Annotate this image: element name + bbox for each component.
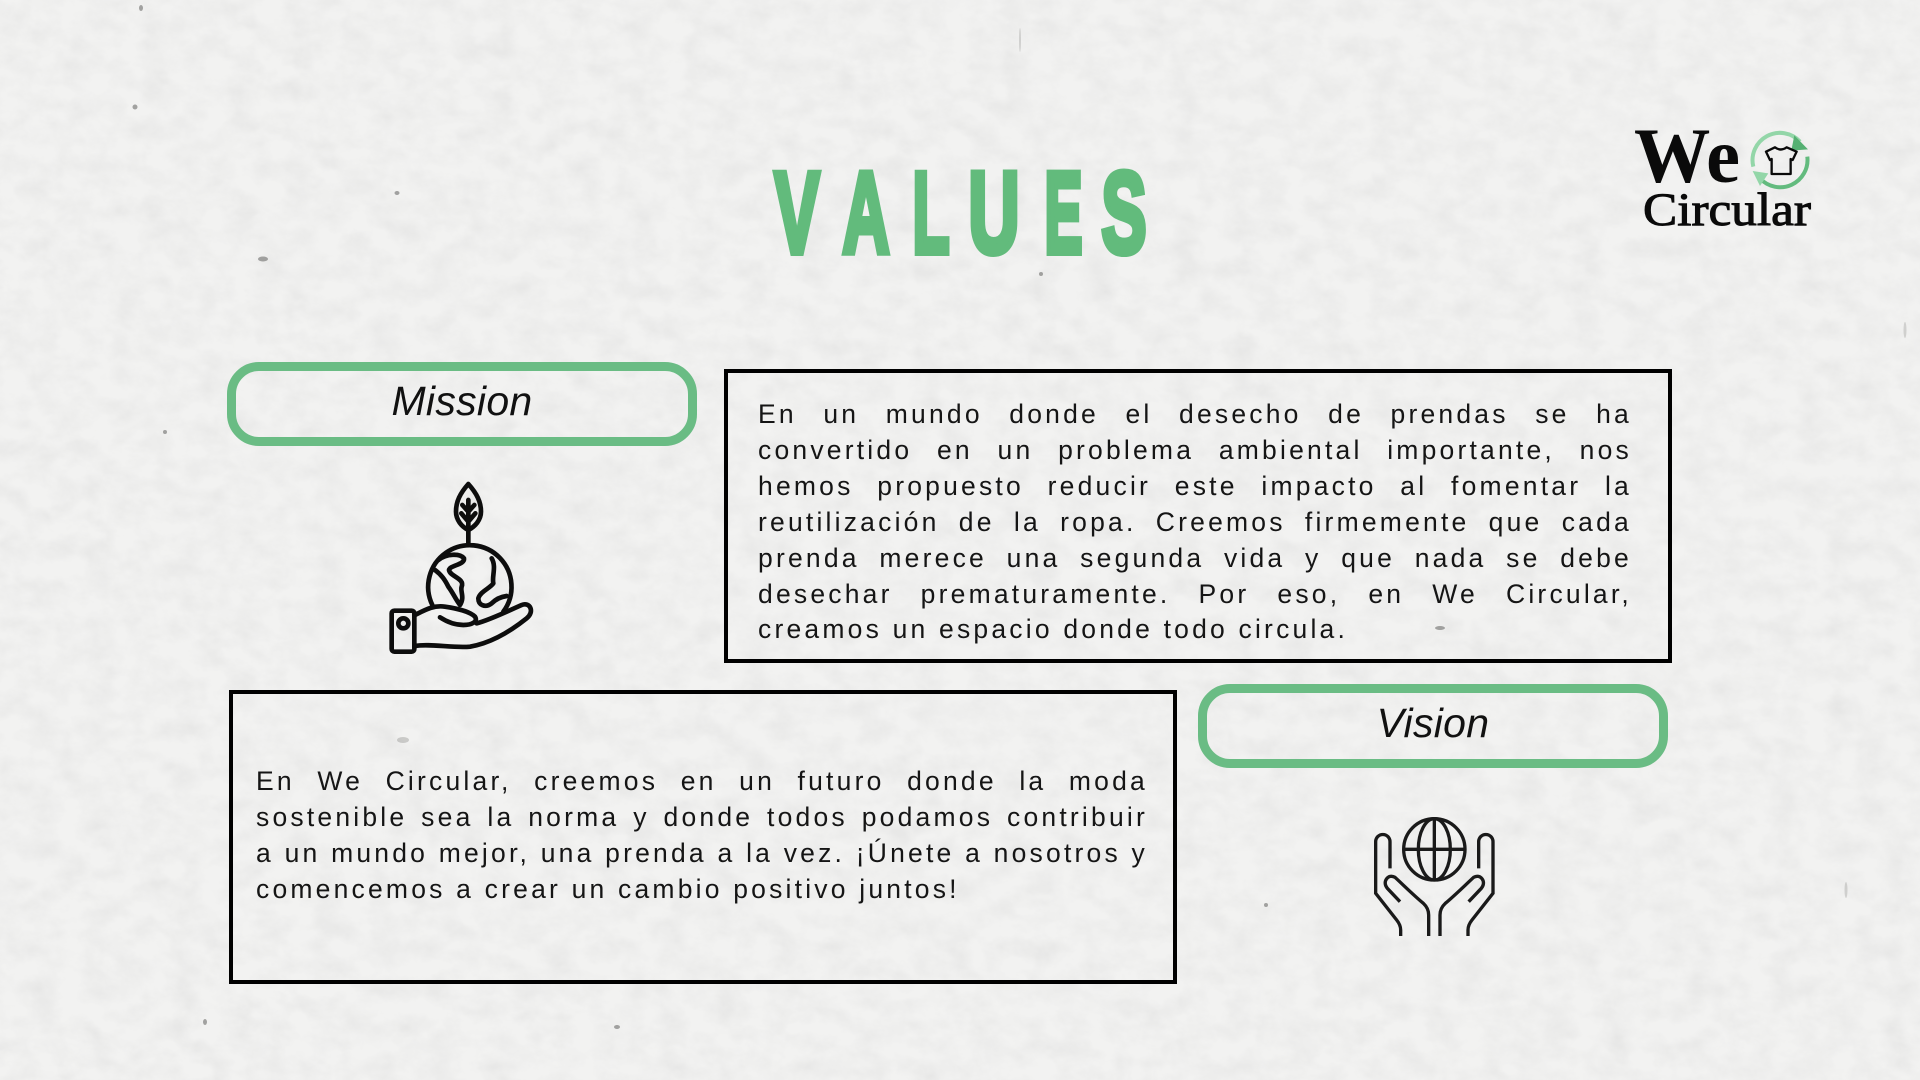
logo: We Circular (1634, 112, 1812, 236)
mission paragraph: En un mundo donde el desecho de prendas se ha (758, 399, 1632, 429)
icon: hands holding world (1374, 817, 1495, 936)
vision paragraph: sostenible sea la norma y donde todos podamos contribuir (256, 802, 1148, 832)
vision paragraph: En We Circular, creemos en un futuro donde la moda (256, 766, 1148, 796)
mission paragraph: prenda merece una segunda vida y que nada se debe (758, 543, 1632, 573)
vision text panel (229, 690, 1177, 984)
vision paragraph: comencemos a crear un cambio positivo juntos! (256, 874, 960, 904)
title (772, 150, 1146, 270)
vision pill heading: Vision (1377, 700, 1489, 746)
mission paragraph: hemos propuesto reducir este impacto al fomentar la (758, 471, 1632, 501)
mission paragraph: creamos un espacio donde todo circula. (758, 614, 1348, 644)
mission paragraph: desechar prematuramente. Por eso, en We Circular, (758, 579, 1632, 609)
mission paragraph: reutilización de la ropa. Creemos firmemente que cada (758, 507, 1632, 537)
mission paragraph: convertido en un problema ambiental importante, nos (758, 435, 1632, 465)
vision paragraph: a un mundo mejor, una prenda a la vez. ¡Únete a nosotros y (256, 838, 1148, 868)
logo: We Circular: Circular (1643, 184, 1811, 236)
mission pill heading (227, 362, 697, 446)
vision pill heading (1198, 684, 1668, 768)
vision paragraph (256, 766, 1148, 904)
logo: We Circular: We (1634, 112, 1740, 199)
mission paragraph (758, 399, 1632, 644)
icon: hand holding globe with sprout (389, 482, 534, 654)
mission pill heading: Mission (391, 378, 533, 424)
mission text panel (724, 369, 1672, 663)
